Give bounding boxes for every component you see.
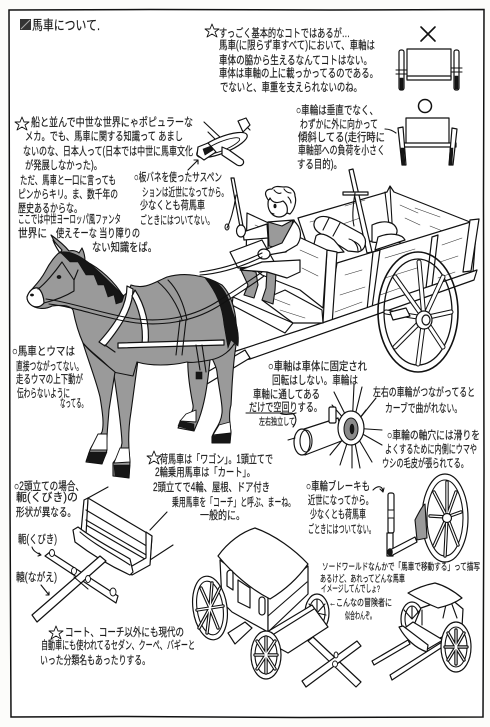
text block: two-horse yoke xyxy=(14,479,84,519)
text block: two-horse yoke: 軛(くびき)の xyxy=(16,491,78,504)
text block: wheel tilt: わずかに外に向かって xyxy=(300,117,378,131)
text block: wheels independent xyxy=(373,385,475,415)
text block: wagon types: 2頭立てで4輪、屋根、ドア付き xyxy=(153,480,270,494)
text block: two-horse yoke: 形状が異なる。 xyxy=(16,505,76,519)
label: yoke xyxy=(18,533,57,556)
text block: axle fixed xyxy=(249,359,367,414)
text block: wagon types: 2輪乗用馬車は「カート」。 xyxy=(155,465,255,479)
coach front right wheel xyxy=(251,631,281,679)
icon: correct axle diagram xyxy=(385,100,457,165)
text block: modern vehicle classes: コート、コーチ以外にも現代の xyxy=(65,626,184,639)
horse body, neck and head xyxy=(27,235,236,376)
text block: two-horse yoke: ○2頭立ての場合、 xyxy=(14,479,84,493)
text block: wheel tilt: ○車輪は垂直でなく、 xyxy=(296,103,378,117)
text block: horse and cart connection: 直接つながってない。 xyxy=(16,359,83,373)
text block: wheel tilt: する目的)。 xyxy=(297,157,342,171)
text block: leaf spring note xyxy=(134,170,228,227)
horse illustration xyxy=(27,235,264,478)
text block: leaf spring note: ごときにはついてない。 xyxy=(140,213,214,227)
text block: brake note xyxy=(306,479,375,536)
text block: medieval carriage intro xyxy=(15,115,193,254)
small cart illustration xyxy=(372,583,471,680)
text block: medieval carriage intro: メカ。でも、馬車に関する知識って あまし xyxy=(25,129,183,143)
text block: sword world remark: あるけど、あれってどんな馬車 xyxy=(320,573,405,585)
torso xyxy=(243,220,300,255)
text block: axle fixed: だけで空回りする。 xyxy=(249,401,322,414)
text block: axle basics: 車体の脇から生えるなんてコトはない。 xyxy=(219,53,372,67)
text block: medieval carriage intro: が発展しなかった)。 xyxy=(25,158,102,172)
text block: wagon types: 乗用馬車を「コーチ」と呼ぶ、まーね。 xyxy=(172,495,295,509)
yoke and shaft xyxy=(32,550,118,622)
text block: modern vehicle classes: 自動車にも使われてるセダン、クーペ、バギーと xyxy=(41,638,195,652)
coach yoke and shaft xyxy=(302,637,361,687)
harness xyxy=(99,280,224,379)
text block: axle basics: すっごく基本的なコトではあるが… xyxy=(219,26,350,40)
text block: hub lining xyxy=(382,428,480,470)
label: yoke: 軛(くびき) xyxy=(18,533,57,546)
text block: brake note: 近世になってから。 xyxy=(308,493,373,507)
title: 馬車について. xyxy=(32,18,100,33)
far front leg xyxy=(113,360,138,478)
text block: modern vehicle classes xyxy=(40,626,195,667)
text block: sword world remark: ←こんなの冒険者に xyxy=(329,598,392,609)
text block: axle fixed: 回転はしない。車輪は xyxy=(272,373,358,387)
coach body xyxy=(218,528,308,632)
text block: leaf spring note: 少なくとも荷馬車 xyxy=(140,198,205,212)
text block: medieval carriage intro: ただ、馬車と一口に言っても xyxy=(20,173,116,187)
text block: brake note: ごときにはついてない。 xyxy=(308,522,375,536)
right wheel xyxy=(441,622,471,672)
text block: medieval carriage intro: ピンからキリ。ま、数千年の xyxy=(18,187,118,201)
text block: sword world remark xyxy=(320,561,480,622)
two-horse cart front diagram xyxy=(32,487,173,622)
near side panel of the wagon xyxy=(323,219,479,325)
text block: medieval carriage intro: 船と並んで中世な世界にゃポピュラーな xyxy=(31,115,193,129)
infographic page: なってる。 xyxy=(60,397,87,410)
text block: wheel tilt xyxy=(296,103,385,171)
text block: wheel tilt: 車軸部への負荷を小さく xyxy=(298,143,385,157)
reins xyxy=(46,253,264,324)
text block: wagon types xyxy=(147,451,295,522)
whip xyxy=(225,178,243,230)
head xyxy=(266,186,296,217)
text block: sword world remark: 似合わんぞ。 xyxy=(345,610,375,622)
text block: modern vehicle classes: いった分類名もあったりする。 xyxy=(40,653,150,667)
sword xyxy=(343,169,372,253)
text block: medieval carriage intro: 歴史あるからな。 xyxy=(18,202,82,215)
text block: brake note: 少なくとも荷馬車 xyxy=(310,507,366,521)
hands xyxy=(236,225,270,259)
left wheel xyxy=(401,602,423,636)
text block: horse and cart connection: 伝わらないように xyxy=(17,387,70,400)
text block: horse and cart connection xyxy=(12,344,87,410)
wagon illustration xyxy=(197,169,479,387)
coach front left wheel xyxy=(189,574,252,644)
far and end walls of the wagon xyxy=(298,186,470,268)
callout: independent wheels: 左右独立して xyxy=(259,416,295,428)
coach footboard xyxy=(267,605,328,653)
text block: axle basics xyxy=(205,24,378,94)
cart body xyxy=(399,583,463,652)
text block: medieval carriage intro: ないのな、日本人って(日本では中世に馬車文化 xyxy=(23,144,193,158)
driver footwell and seat xyxy=(230,213,327,333)
bedrolls and sacks xyxy=(314,216,405,254)
text block: leaf spring note: ○板バネを使ったサスペン xyxy=(134,170,222,184)
text block: brake note: ○車輪ブレーキも xyxy=(306,479,370,493)
near hind leg xyxy=(205,340,236,443)
icon: wrong axle diagram xyxy=(396,27,462,90)
icon: wheel brake detail xyxy=(373,474,468,562)
text block: medieval carriage intro: ない知識をば。 xyxy=(92,240,157,254)
text block: wagon types: 一般的に。 xyxy=(200,508,245,522)
text block: axle basics: 馬車(に限らず車すべて)において、車軸は xyxy=(219,38,375,52)
icon: wheel hub detail xyxy=(288,385,382,468)
text block: axle fixed: 車軸に通してある xyxy=(253,387,320,401)
text block: horse and cart connection: 走るウマの上下動が xyxy=(16,372,83,386)
coach illustration xyxy=(189,528,361,687)
rear wheel xyxy=(378,252,458,372)
boots and legs xyxy=(240,260,300,304)
text block: medieval carriage intro: ここでは中世ヨーロッパ風ファンタ xyxy=(18,213,121,226)
cart shafts xyxy=(372,640,444,680)
text block: medieval carriage intro: 使えそーな 当り障りの xyxy=(56,226,140,240)
cart front bench xyxy=(73,487,173,575)
callout: independent wheels xyxy=(246,413,296,428)
text block: axle fixed: ○車軸は車体に固定され xyxy=(268,359,367,373)
mane xyxy=(60,252,124,304)
text block: wheel tilt: 傾斜してる(走行時に xyxy=(298,131,385,144)
text block: leaf spring note: ションは近世になってから。 xyxy=(142,185,228,199)
label: shaft: 轅(ながえ) xyxy=(16,570,57,584)
tail xyxy=(205,278,239,348)
far hind leg xyxy=(178,355,210,431)
icon: leaf spring detail xyxy=(188,118,250,170)
text block: sword world remark: イメージしてんでしょ? xyxy=(321,584,380,595)
text block: axle basics: 車体は車軸の上に載っかってるのである。 xyxy=(219,66,378,80)
wagon bed and shaft xyxy=(197,270,477,387)
text block: medieval carriage intro: 世界に xyxy=(18,227,47,240)
text block: axle basics: でないと、車重を支えられないのね。 xyxy=(220,80,362,94)
text block: wagon types: 荷馬車は「ワゴン」。1頭立てで xyxy=(160,452,273,466)
text block: horse and cart connection: ○馬車とウマは xyxy=(12,344,75,358)
driver boy xyxy=(225,178,300,304)
near front leg xyxy=(83,343,115,464)
label: shaft xyxy=(16,570,57,595)
coach rear wheel xyxy=(305,594,329,632)
